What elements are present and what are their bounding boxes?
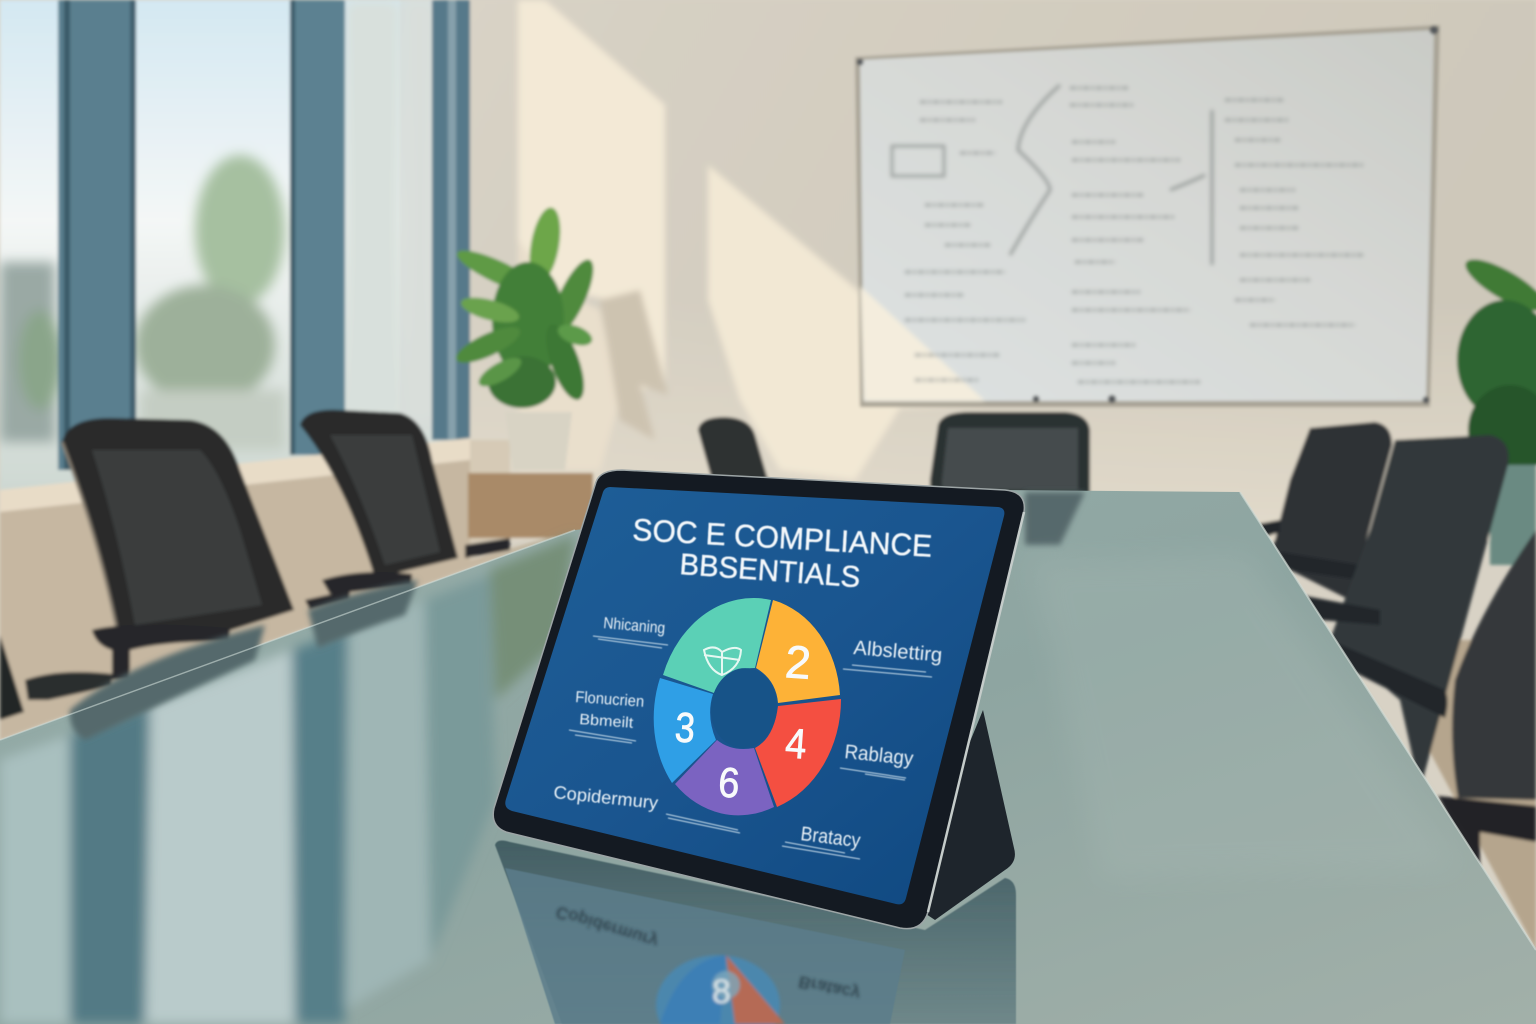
- reflected screen text: [554, 902, 862, 1004]
- label: Copidermury: Copidermury: [553, 782, 659, 813]
- blurred table reflection of whiteboard: [1030, 555, 1460, 880]
- heading: [632, 512, 933, 594]
- chair one back: [62, 418, 294, 645]
- segment numbers: 2: [784, 635, 813, 689]
- left chairs: [0, 410, 510, 720]
- chair far back center: [930, 412, 1090, 495]
- window sill and lower wall: [0, 438, 575, 740]
- chair one armrests: [92, 624, 230, 680]
- heading: SOC E COMPLIANCE: [632, 512, 933, 564]
- whiteboard: [855, 25, 1440, 407]
- segment 4: red: [755, 699, 841, 807]
- reflected wheel: 8: [712, 973, 731, 1011]
- tablet reflection in table: [495, 841, 1016, 1024]
- window reflections in table: [0, 535, 575, 1024]
- back chairs: [698, 412, 1090, 495]
- reflected screen text: Copidermury: [554, 902, 661, 951]
- whiteboard handwriting, blurred: [892, 85, 1365, 382]
- wall lower glow: [470, 300, 1536, 540]
- windows with frames: [0, 0, 470, 490]
- right chairs: [1252, 422, 1536, 1000]
- chair two armrests: [305, 538, 510, 610]
- label: Copidermury: [553, 782, 740, 833]
- chair reflections in table: [70, 492, 1085, 740]
- segment 2: orange: [756, 600, 840, 703]
- plant on side stand: [452, 205, 602, 538]
- label: Rablagy: [840, 741, 914, 780]
- label: Bratacy: [782, 823, 862, 859]
- segment 6: purple: [675, 740, 774, 815]
- floor at right: [1370, 640, 1536, 950]
- label: Nhicaning: Nhicaning: [603, 615, 666, 637]
- segment numbers: 4: [784, 721, 808, 768]
- heading: BBSENTIALS: [678, 548, 861, 594]
- chair two back: [300, 410, 458, 578]
- reflected wheel: [656, 955, 785, 1024]
- segment: teal shield: [663, 598, 771, 693]
- tablet stand: [905, 710, 1015, 920]
- tablet body: [493, 470, 1024, 929]
- chair right three: [1452, 530, 1536, 800]
- wood stand: [468, 473, 593, 538]
- whiteboard sunlight: [860, 286, 985, 401]
- segment numbers: [673, 635, 813, 807]
- label: Albslettirg: Albslettirg: [853, 637, 943, 667]
- label: Flonucrien Bbmeilt: Flonucrien: [575, 689, 645, 711]
- window glass: outdoor view: [0, 0, 470, 490]
- label: Albslettirg: [843, 637, 943, 677]
- reflected screen text: Bratacy: [797, 972, 862, 1004]
- tablet: [493, 470, 1024, 929]
- window mullions: [58, 0, 136, 470]
- back wall: [0, 0, 1536, 540]
- segment numbers: 3: [673, 705, 696, 752]
- sunlight patches on wall: [518, 0, 985, 480]
- donut chart: [654, 598, 841, 815]
- tablet screen: [505, 487, 1004, 904]
- table edge highlight: [1240, 492, 1536, 950]
- glass table top: [0, 490, 1536, 1024]
- label: Rablagy: Rablagy: [843, 741, 914, 770]
- plant pot: [505, 412, 572, 470]
- plant at right edge: [1457, 250, 1536, 565]
- side labels: [553, 615, 943, 859]
- label: Flonucrien Bbmeilt: Bbmeilt: [579, 711, 635, 732]
- outdoor trees and building: [0, 0, 435, 450]
- shield icon: [704, 647, 741, 675]
- chair far back left: [698, 417, 768, 480]
- plant leaves: [452, 205, 602, 408]
- label: Bratacy: Bratacy: [799, 823, 862, 852]
- donut hole: [707, 665, 781, 751]
- whiteboard corner clips: [856, 26, 1438, 404]
- chair right one: [1270, 422, 1392, 600]
- chair right two: [1330, 435, 1509, 790]
- segment 3: blue: [654, 678, 716, 783]
- label: Nhicaning: [593, 615, 668, 648]
- segment numbers: 6: [717, 760, 741, 807]
- label: Flonucrien Bbmeilt: [569, 689, 645, 743]
